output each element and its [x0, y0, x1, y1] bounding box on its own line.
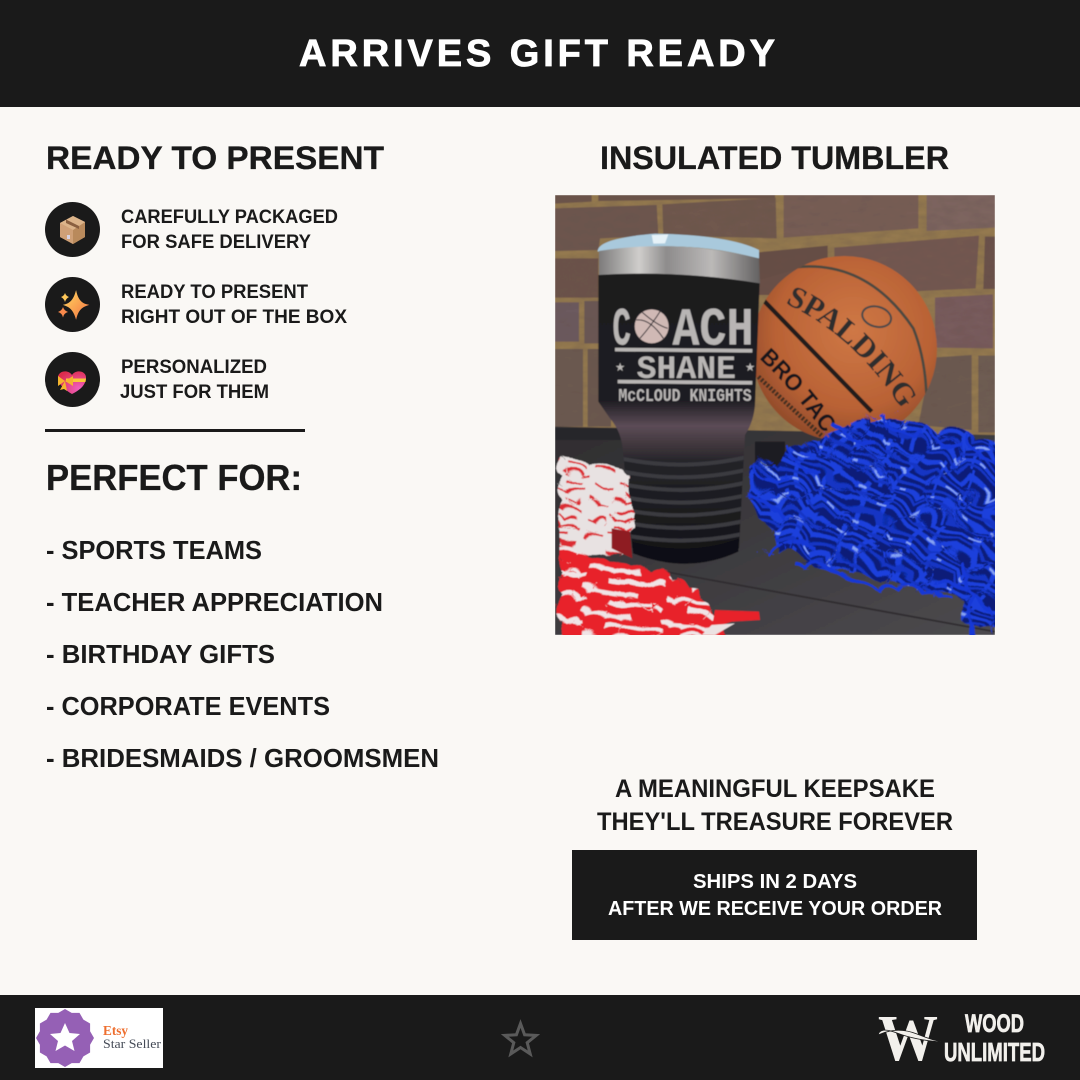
list: use cases: - CORPORATE EVENTS: [46, 691, 330, 721]
engraving: ACH: [672, 302, 754, 362]
heading: ready to present: READY TO PRESENT: [46, 140, 384, 176]
badge: etsy star seller: [35, 1008, 163, 1068]
basketball icon engraving: [635, 309, 669, 343]
feature: carefully packaged: [45, 202, 338, 257]
list: use cases: [46, 535, 439, 773]
title: ARRIVES GIFT READY: [299, 33, 775, 75]
tumbler body: [598, 274, 760, 561]
red shreds: [555, 538, 725, 635]
heading: perfect for: PERFECT FOR:: [46, 457, 302, 498]
text: carefully packaged: FOR SAFE DELIVERY: [121, 232, 311, 253]
header bar: [0, 0, 1080, 107]
logo: wood unlimited: [878, 1002, 1045, 1075]
floor: [555, 427, 995, 635]
list: use cases: - TEACHER APPRECIATION: [46, 587, 383, 617]
feature: personalized: [45, 352, 269, 407]
icon: purple star badge: [36, 1009, 94, 1067]
shipping callout: SHIPS IN 2 DAYS: [693, 871, 857, 893]
tumbler: [598, 234, 760, 564]
icon: gift heart: [45, 352, 100, 407]
keepsake message: [597, 775, 953, 836]
icon: package box: [45, 202, 100, 257]
white shreds: [555, 452, 629, 548]
basketball: [756, 256, 938, 440]
text: carefully packaged: CAREFULLY PACKAGED: [121, 207, 338, 228]
body ribs: [620, 457, 748, 541]
text: ready to present: [121, 282, 347, 328]
lid and steel band: [598, 234, 760, 284]
engraving: SHANE: [637, 351, 736, 388]
badge: etsy star seller: Etsy: [103, 1024, 128, 1039]
icon: outline star: [505, 1024, 536, 1054]
tumbler base: [632, 538, 739, 564]
photo: engraved tumbler with basketball and pom-poms: [555, 195, 995, 635]
badge: etsy star seller: Star Seller: [103, 1036, 162, 1051]
text: personalized: PERSONALIZED: [121, 357, 267, 378]
ball model text: BRO TAC: [760, 348, 836, 432]
brick wall: [555, 195, 995, 435]
text: personalized: JUST FOR THEM: [120, 382, 269, 403]
engraving: [612, 308, 755, 402]
divider line: [45, 429, 305, 432]
keepsake message: A MEANINGFUL KEEPSAKE: [615, 775, 935, 803]
text: ready to present: RIGHT OUT OF THE BOX: [121, 307, 347, 328]
engraving: ★: [616, 363, 625, 374]
keepsake message: THEY'LL TREASURE FOREVER: [597, 808, 953, 836]
heading: insulated tumbler: INSULATED TUMBLER: [600, 140, 949, 176]
logo mark: W: [878, 1002, 938, 1075]
text: carefully packaged: [121, 207, 338, 253]
feature: ready to present: [45, 277, 347, 332]
shipping callout: AFTER WE RECEIVE YOUR ORDER: [608, 898, 943, 920]
list: use cases: - BIRTHDAY GIFTS: [46, 639, 275, 669]
blue pom-pom: [742, 403, 1002, 635]
text: personalized: [120, 357, 269, 403]
engraving: McCLOUD KNIGHTS: [618, 385, 752, 407]
text: ready to present: READY TO PRESENT: [121, 282, 308, 303]
engraving: ★: [746, 363, 755, 374]
engraving: C: [612, 302, 631, 362]
ball lettering: SPALDING: [786, 287, 916, 406]
list: use cases: - BRIDESMAIDS / GROOMSMEN: [46, 743, 439, 773]
red and white pom-pom: [555, 452, 760, 635]
shipping callout: [572, 850, 977, 940]
list: use cases: - SPORTS TEAMS: [46, 535, 262, 565]
footer bar: [0, 995, 1080, 1080]
logo: wood unlimited: WOOD: [965, 1010, 1024, 1038]
icon: sparkles: [45, 277, 100, 332]
